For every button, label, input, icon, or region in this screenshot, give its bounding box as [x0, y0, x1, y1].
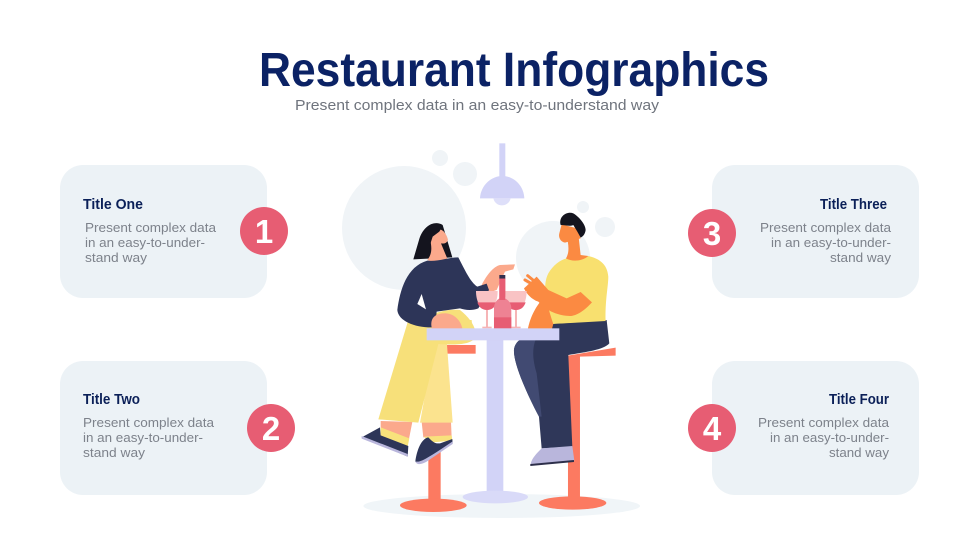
- icon: left wine glass: [476, 291, 498, 328]
- text block: title two: in an easy-to-under-: [83, 430, 203, 445]
- man upper body: [524, 213, 608, 330]
- text block: title three: Present complex data: [760, 220, 892, 235]
- number badge 1: 1: [255, 213, 273, 250]
- number badge 3: [688, 209, 736, 257]
- icon: wine bottle: [494, 275, 511, 330]
- woman legs and shoes: [362, 320, 473, 464]
- icon: right wine glass: [505, 291, 527, 328]
- number badge 4: [688, 404, 736, 452]
- text block: title one: Present complex data: [85, 220, 217, 235]
- text block: title one: in an easy-to-under-: [85, 235, 205, 250]
- text block: title one: stand way: [85, 250, 148, 265]
- text block: title one: [85, 220, 217, 265]
- table top: [427, 317, 559, 340]
- text block: title three: [760, 220, 892, 265]
- heading: title four: Title Four: [829, 392, 889, 408]
- wine glasses and bottle: [476, 275, 527, 330]
- text block: title three: in an easy-to-under-: [771, 235, 891, 250]
- illustration: couple at restaurant table: [342, 143, 640, 518]
- heading: title one: Title One: [83, 197, 143, 213]
- title: Restaurant Infographics: [259, 44, 769, 97]
- icon: hanging lamp: [480, 143, 524, 205]
- woman upper body: [397, 223, 515, 330]
- text block: title three: stand way: [830, 250, 892, 265]
- number badge 2: 2: [262, 410, 280, 447]
- panel: title one: [60, 165, 288, 298]
- number badge 2: [247, 404, 295, 452]
- text block: title four: in an easy-to-under-: [770, 430, 889, 445]
- man legs and shoe: [514, 320, 609, 466]
- number badge 3: 3: [703, 215, 721, 252]
- heading: title three: Title Three: [820, 197, 887, 213]
- heading: title two: Title Two: [83, 392, 140, 408]
- background circles: [342, 150, 615, 295]
- text block: title four: stand way: [829, 445, 889, 460]
- woman figure: [362, 223, 515, 464]
- text block: title four: Present complex data: [758, 415, 890, 430]
- man figure: [514, 213, 609, 466]
- panel: title three: [688, 165, 919, 298]
- text block: title two: stand way: [83, 445, 146, 460]
- stools and table legs: [400, 338, 616, 512]
- floor shadow: [363, 494, 640, 518]
- text block: title two: [83, 415, 215, 460]
- panel: title four: [688, 361, 919, 495]
- number badge 4: 4: [703, 410, 722, 447]
- text block: title two: Present complex data: [83, 415, 215, 430]
- text block: title four: [758, 415, 890, 460]
- number badge 1: [240, 207, 288, 255]
- panel: title two: [60, 361, 295, 495]
- subtitle: Present complex data in an easy-to-understand way: [295, 97, 660, 114]
